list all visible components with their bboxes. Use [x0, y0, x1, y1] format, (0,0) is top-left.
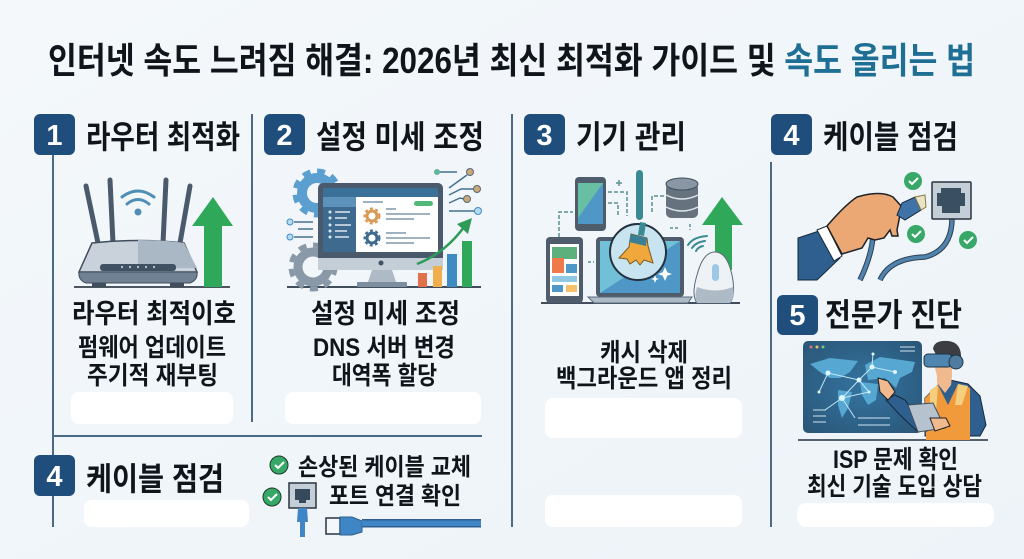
text block: 펌웨어 업데이트: [78, 334, 226, 362]
icon: router with arrow: [74, 180, 233, 287]
heading: devices: 기기 관리: [576, 119, 686, 155]
blank label: [797, 503, 994, 527]
heading: expert: 전문가 진단: [825, 297, 962, 333]
badge 4: [771, 114, 812, 155]
text block: 포트 연결 확인: [329, 483, 461, 510]
text block: [311, 299, 460, 390]
text block: [72, 299, 236, 390]
badge 2: [264, 114, 305, 155]
blank label: [545, 398, 742, 438]
icon: check marks, port and cable: [263, 456, 481, 537]
title: 인터넷 속도 느려짐 해결: 2026년 최신 최적화 가이드 및 속도 올리는 법: [48, 40, 975, 81]
panel: cable check bottom: [34, 454, 481, 537]
badge 1: [34, 114, 75, 155]
heading: cable: 케이블 점검: [823, 119, 958, 155]
text block: 백그라운드 앱 정리: [556, 365, 732, 393]
text block: [807, 446, 982, 501]
icon: technician with world map: [798, 341, 988, 440]
badge 4: 4: [783, 120, 800, 152]
blank label: [71, 392, 233, 424]
blank label: [84, 500, 249, 527]
icon: hand plugging cable: [798, 172, 977, 280]
badge 3: 3: [536, 120, 553, 152]
panel: cable check: [771, 114, 977, 280]
text block: 라우터 최적이호: [72, 299, 236, 329]
icon: monitor with gears and chart: [287, 168, 482, 289]
heading: settings: 설정 미세 조정: [316, 119, 484, 155]
text block: ISP 문제 확인: [833, 446, 958, 474]
panel: settings: [264, 114, 484, 424]
blank label: [285, 392, 481, 424]
heading: router: 라우터 최적화: [86, 119, 240, 155]
text block: 손상된 케이블 교체: [298, 454, 471, 481]
badge 1: 1: [46, 120, 63, 152]
text block: 최신 기술 도입 상담: [807, 473, 982, 501]
badge 5: [777, 295, 818, 335]
text block: [298, 454, 471, 510]
badge 2: 2: [276, 120, 293, 152]
text block: DNS 서버 변경: [313, 334, 455, 362]
panel: router optimisation: [34, 114, 240, 424]
badge 4 bottom: [34, 455, 75, 496]
text block: 캐시 삭제: [600, 339, 688, 367]
icon: devices with broom: [541, 170, 743, 303]
badge 5: 5: [789, 300, 806, 332]
panel: device management: [524, 114, 743, 527]
badge 3: [524, 114, 565, 155]
text block: 주기적 재부팅: [87, 362, 218, 390]
text block: 대역폭 할당: [332, 362, 437, 390]
badge 4 bottom: 4: [46, 461, 63, 493]
panel: expert diagnosis: [777, 295, 994, 527]
text block: 설정 미세 조정: [311, 299, 460, 329]
heading: cable bottom: 케이블 점검: [86, 461, 224, 497]
text block: [556, 339, 732, 393]
blank label: [545, 495, 742, 527]
